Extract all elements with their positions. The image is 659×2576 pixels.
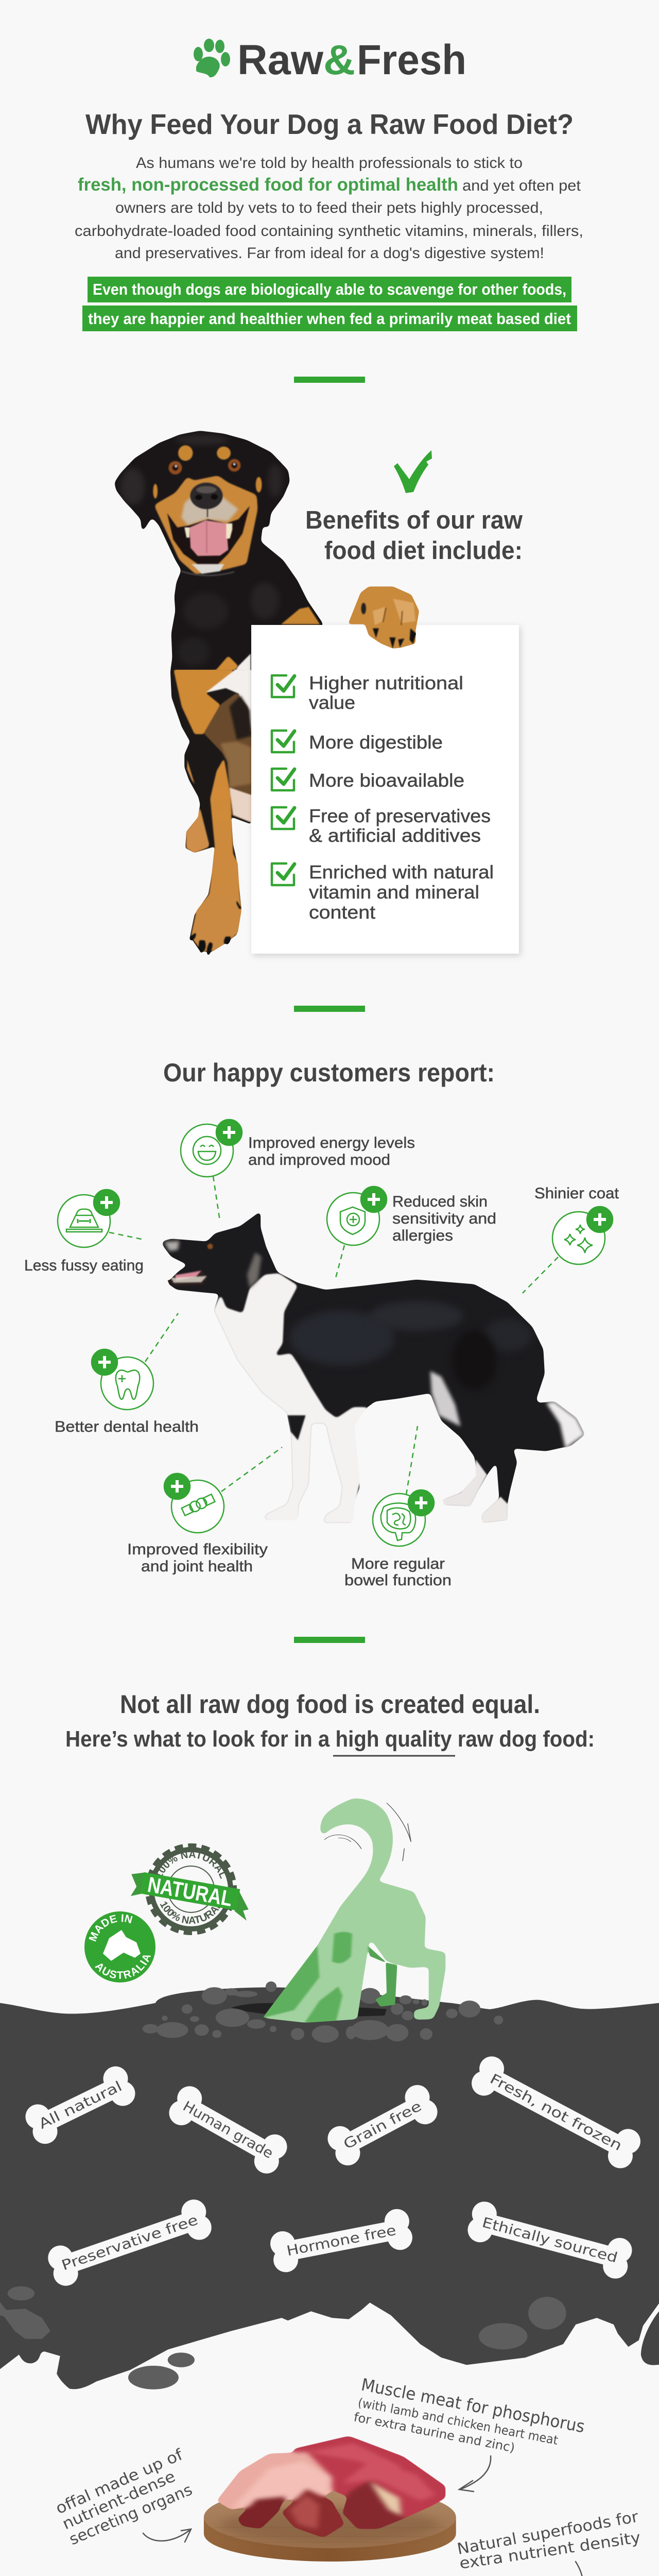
heading: benefits: Benefits of our raw — [305, 506, 523, 534]
icon: food bowl / fussy eating — [58, 1190, 144, 1247]
bone: fresh not frozen: Fresh, not frozen — [487, 2071, 625, 2154]
heading: benefits: food diet include: — [324, 537, 523, 565]
label: energy: and improved mood — [248, 1151, 390, 1168]
intro paragraph: fresh, non-processed food for optimal health — [78, 175, 458, 195]
bone: ethically sourced — [465, 2199, 635, 2281]
bone: grain free — [323, 2081, 442, 2170]
label: bowel: bowel function — [344, 1572, 452, 1589]
intro paragraph: and yet often pet — [462, 177, 581, 194]
label: skin — [392, 1193, 496, 1244]
bone: preservative free — [45, 2196, 215, 2289]
intro paragraph: owners are told by vets to to feed their pets highly processed, — [115, 199, 543, 216]
badge: made in Australia — [84, 1911, 155, 1982]
bone: hormone free — [268, 2207, 414, 2274]
label: skin: allergies — [392, 1227, 453, 1244]
badge: 100% natural seal: 100% NATURAL — [157, 1852, 224, 1879]
badge: made in Australia: AUSTRALIA — [95, 1956, 151, 1979]
annotation: muscle meat: for extra taurine and zinc) — [353, 2410, 516, 2455]
benefit item: higher nutritional value — [272, 672, 463, 713]
wordmark — [237, 37, 466, 83]
benefit item: more bioavailable: More bioavailable — [309, 770, 464, 791]
icon: shield / skin — [327, 1187, 387, 1280]
benefit item: enriched with vitamins: content — [309, 902, 375, 923]
bone: human grade: Human grade — [180, 2098, 276, 2162]
label: skin: sensitivity and — [392, 1210, 496, 1227]
benefit item: enriched with vitamins — [272, 861, 494, 923]
benefit item: free of preservatives: & artificial additives — [309, 825, 481, 846]
benefit item: enriched with vitamins: Enriched with natural — [309, 861, 494, 883]
intro paragraph: As humans we're told by health professionals to stick to — [136, 155, 523, 172]
label: coat: Shinier coat — [534, 1185, 619, 1202]
food board: meat and offal — [204, 2436, 456, 2562]
icon: tooth / dental — [92, 1313, 178, 1410]
label: flexibility: and joint health — [141, 1558, 253, 1575]
label: skin: Reduced skin — [392, 1193, 488, 1210]
panel: dark soil ground — [0, 1981, 659, 2389]
bone: preservative free: Preservative free — [60, 2212, 200, 2274]
arrow: to meat — [459, 2456, 491, 2492]
callout: green highlighted statement — [82, 277, 577, 331]
arrow: to offal — [143, 2529, 191, 2542]
annotation: muscle meat — [353, 2375, 586, 2492]
label: bowel — [344, 1555, 452, 1589]
badge: 100% natural seal — [131, 1843, 249, 1935]
wordmark: Fresh — [357, 37, 466, 83]
intro paragraph: and preservatives. Far from ideal for a dog's digestive system! — [115, 245, 544, 262]
label: flexibility — [127, 1541, 268, 1575]
bone: fresh not frozen — [467, 2052, 645, 2173]
icon: intestines / bowel — [373, 1426, 434, 1546]
callout: green highlighted statement: Even though dogs are biologically able to scavenge for other foods, — [93, 280, 566, 298]
badge: 100% natural seal: NATURAL — [146, 1872, 234, 1911]
benefit item: more digestible: More digestible — [309, 732, 443, 753]
annotation: superfoods: Natural superfoods for — [456, 2507, 640, 2558]
annotation: offal: secreting organs — [66, 2481, 195, 2549]
benefit item: free of preservatives — [272, 805, 491, 846]
icon: large green tick — [394, 450, 432, 493]
label: energy: Improved energy levels — [248, 1134, 415, 1151]
annotation: muscle meat: (with lamb and chicken heart meat — [357, 2395, 559, 2448]
icon: happy face / energy — [181, 1120, 242, 1221]
annotation: offal: nutrient-dense — [60, 2467, 178, 2533]
badge: 100% natural seal: 100% NATURAL — [160, 1901, 220, 1924]
bone: hormone free: Hormone free — [285, 2223, 397, 2259]
wordmark: & — [323, 37, 355, 83]
annotation: offal — [53, 2446, 195, 2549]
benefit item: enriched with vitamins: vitamin and mineral — [309, 882, 479, 903]
label: energy — [248, 1134, 415, 1168]
panel: benefits card — [251, 586, 519, 954]
benefit item: free of preservatives: Free of preservatives — [309, 805, 491, 826]
callout: green highlighted statement: they are happier and healthier when fed a primarily meat based diet — [88, 310, 571, 328]
label: dental: Better dental health — [55, 1418, 199, 1435]
label: fussy eating: Less fussy eating — [24, 1257, 144, 1274]
icon: sparkles / coat — [523, 1207, 613, 1293]
bone: grain free: Grain free — [341, 2098, 424, 2153]
label: flexibility: Improved flexibility — [127, 1541, 268, 1558]
photo: border collie — [162, 1211, 585, 1523]
bone: ethically sourced: Ethically sourced — [480, 2214, 619, 2266]
annotation: superfoods: extra nutrient density — [458, 2529, 641, 2573]
bone: human grade — [165, 2082, 291, 2178]
heading: not all raw dog food is equal: Not all raw dog food is created equal. — [120, 1690, 540, 1719]
photo: rottweiler-mix dog — [114, 431, 323, 955]
icon: green paw — [194, 39, 230, 77]
heading: not all raw dog food is equal: Here’s what to look for in a high quality raw dog food: — [65, 1726, 595, 1752]
badge: made in Australia: MADE IN — [89, 1914, 133, 1942]
bone: all natural: All natural — [36, 2078, 125, 2132]
heading: happy customers: Our happy customers report: — [163, 1058, 495, 1087]
annotation: superfoods — [456, 2507, 641, 2576]
annotation: muscle meat: Muscle meat for phosphorus — [360, 2375, 586, 2436]
wordmark: Raw — [237, 37, 323, 83]
illustration: green dog digging — [263, 1798, 445, 2023]
intro paragraph: carbohydrate-loaded food containing synthetic vitamins, minerals, fillers, — [75, 223, 583, 240]
arrow: to superfoods — [573, 2562, 585, 2576]
title: Why Feed Your Dog a Raw Food Diet? — [85, 108, 574, 140]
icon: joint / flexibility — [164, 1447, 282, 1533]
heading: not all raw dog food is equal — [65, 1690, 595, 1757]
bone: all natural — [21, 2062, 140, 2148]
benefit item: higher nutritional value: value — [309, 692, 355, 713]
icon: dog paw on card — [348, 586, 419, 649]
label: bowel: More regular — [351, 1555, 445, 1572]
benefit item: higher nutritional value: Higher nutritional — [309, 672, 463, 693]
logo: Raw&Fresh header — [194, 37, 466, 83]
heading: benefits — [305, 506, 523, 565]
intro paragraph — [75, 155, 583, 262]
food board: bones and superfoods — [377, 2568, 629, 2576]
annotation: offal: offal made up of — [53, 2446, 186, 2518]
